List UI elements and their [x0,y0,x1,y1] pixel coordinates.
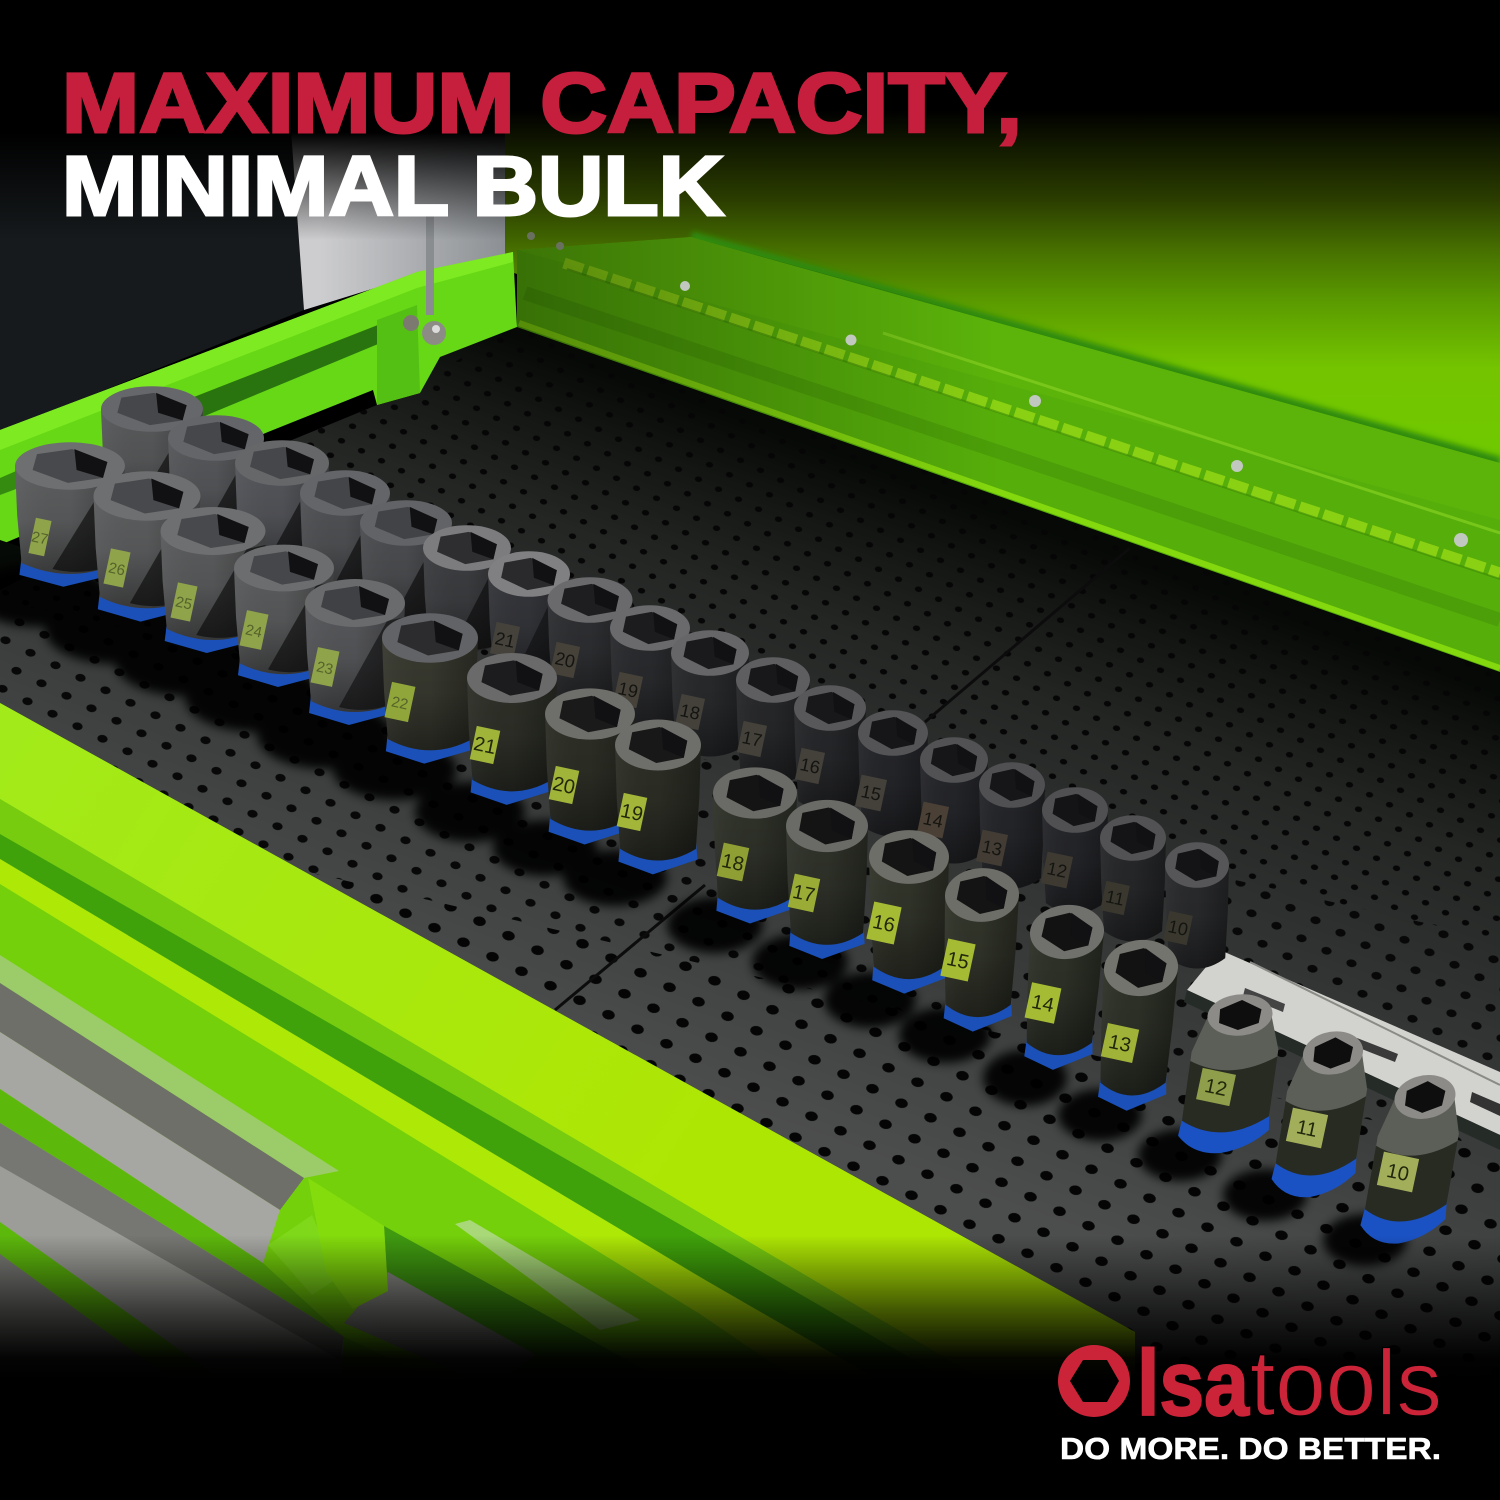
back row size labels: 13 [980,836,1004,860]
front row size labels: 14 [1030,991,1056,1017]
handle bracket [268,1178,388,1309]
rail top face [0,703,1135,1470]
wordmark bold: lsa [1137,1331,1250,1435]
title line 2: MINIMAL BULK [62,139,724,233]
front row size labels: 13 [1107,1031,1133,1057]
front row size labels: 27 [30,528,50,549]
front row size labels: 23 [315,658,335,679]
tagline: DO MORE. DO BETTER. [1060,1431,1441,1466]
hinge screws [527,232,1468,547]
drawer lid [505,110,1500,600]
title [62,56,1022,233]
front row size labels: 20 [551,773,577,799]
front row of sockets [15,442,1471,1244]
dark wall upper left [0,130,304,432]
front row size labels: 16 [871,911,897,937]
front row size labels: 22 [390,693,410,714]
aluminium rail [1184,950,1500,1150]
back row size labels: 20 [553,648,577,672]
logo: Olsatools [1058,1331,1442,1466]
front row size labels: 17 [791,881,817,907]
back row size labels: 18 [678,700,702,724]
front row size labels: 12 [1203,1075,1229,1101]
back row size labels: 19 [616,678,640,702]
back row size labels [490,622,1193,945]
socket shadows [0,563,1407,1266]
pale wall behind drawer [291,130,505,310]
front rail [0,703,1135,1470]
black footer [0,1380,1500,1500]
back row size labels: 14 [921,808,945,832]
front row size labels: 24 [244,621,264,642]
hinge knuckles [564,263,1500,573]
title line 1: MAXIMUM CAPACITY, [62,56,1022,150]
front row size labels: 11 [1294,1116,1319,1142]
back row size labels: 12 [1045,858,1069,882]
front row size labels [28,518,1419,1192]
back row size labels: 15 [859,781,883,805]
back row size labels: 21 [493,628,517,652]
front row size labels: 19 [619,800,645,826]
front row size labels: 15 [945,948,971,974]
back row of sockets [101,386,1229,969]
hinged back panel [517,237,1500,672]
wordmark light: tools [1250,1331,1442,1435]
front row size labels: 18 [720,850,746,876]
icon: hex socket letter O [1058,1345,1130,1417]
drawer handles [0,983,536,1400]
back row size labels: 11 [1104,886,1126,910]
front row size labels: 25 [174,593,194,614]
dark fade top [0,0,505,240]
back row size labels: 17 [740,727,764,751]
front row size labels: 21 [472,733,498,759]
dark fade bottom [0,1235,1500,1380]
back row size labels: 10 [1166,916,1190,940]
support arm and ball [403,215,446,345]
front row size labels: 26 [107,559,127,580]
back row size labels: 16 [798,754,822,778]
perforated tray [0,327,1500,1500]
front row size labels: 10 [1385,1160,1411,1186]
left side rail [0,252,517,590]
